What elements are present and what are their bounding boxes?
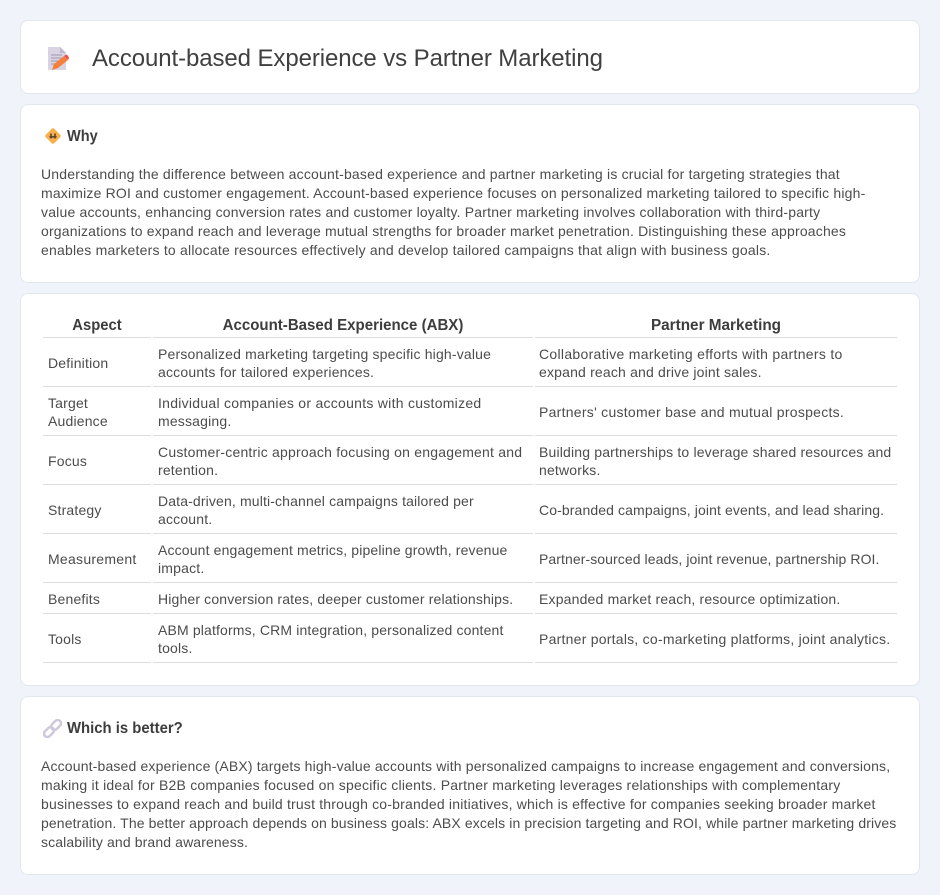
row: target audience: Target	[48, 395, 88, 411]
row: tools: ABM platforms, CRM integration, personalized content	[158, 622, 504, 638]
text block: why body: enables marketers to allocate resources effectively and develop tailored campaigns that align with business goals.	[41, 242, 771, 258]
icon: link	[43, 719, 62, 738]
title: Account-based Experience vs Partner Marketing	[92, 45, 603, 72]
row: target audience	[48, 395, 844, 429]
text block: why body: maximize ROI and customer engagement. Account-based experience focuses on personalized marketing tailored to specific high-	[41, 185, 865, 201]
row: measurement: Account engagement metrics, pipeline growth, revenue	[158, 542, 507, 558]
icon: diamond sign	[45, 128, 61, 144]
panel: title header	[20, 20, 920, 94]
row: benefits	[48, 591, 840, 607]
row: target audience: Audience	[48, 413, 108, 429]
row: measurement	[48, 542, 880, 576]
icon: document with pencil	[48, 47, 69, 70]
row: definition: Collaborative marketing efforts with partners to	[539, 346, 843, 362]
table header	[72, 317, 781, 334]
text block: which is better body: penetration. The better approach depends on business goals: ABX excels in precision targeting and ROI, while partner marketing drives	[41, 815, 896, 831]
row: definition	[48, 346, 843, 380]
text block: which is better body: scalability and brand awareness.	[41, 834, 248, 850]
text block: which is better body: making it ideal for B2B companies focused on specific clients. Partner marketing leverages relationships with complementary	[41, 777, 841, 793]
row: target audience: messaging.	[158, 413, 231, 429]
heading: which is better: Which is better?	[67, 720, 183, 737]
table header: Aspect	[72, 317, 122, 334]
panel: comparison table	[20, 293, 920, 686]
row: definition: Personalized marketing targeting specific high-value	[158, 346, 491, 362]
row: benefits: Benefits	[48, 591, 100, 607]
row: focus: retention.	[158, 462, 218, 478]
text block: which is better body: Account-based experience (ABX) targets high-value accounts with personalized campaigns to increase engagement and conversions,	[41, 758, 890, 774]
row: benefits: Expanded market reach, resource optimization.	[539, 591, 840, 607]
row: focus: networks.	[539, 462, 601, 478]
row: target audience: Individual companies or accounts with customized	[158, 395, 481, 411]
row: focus: Focus	[48, 453, 87, 469]
table header: Account-Based Experience (ABX)	[223, 317, 463, 334]
row: benefits: Higher conversion rates, deeper customer relationships.	[158, 591, 513, 607]
heading: why: Why	[67, 128, 98, 145]
row: measurement: impact.	[158, 560, 204, 576]
row: definition: expand reach and drive joint sales.	[539, 364, 762, 380]
row: tools: tools.	[158, 640, 193, 656]
row: strategy: Strategy	[48, 502, 102, 518]
text block: why body: organizations to expand reach and leverage mutual strengths for broader market penetration. Distinguishing these approaches	[41, 223, 846, 239]
row: focus	[48, 444, 891, 478]
panel: why	[20, 104, 920, 283]
row: focus: Building partnerships to leverage shared resources and	[539, 444, 891, 460]
row: tools	[48, 622, 890, 656]
row: strategy: account.	[158, 511, 212, 527]
row: tools: Partner portals, co-marketing platforms, joint analytics.	[539, 631, 890, 647]
row: measurement: Measurement	[48, 551, 137, 567]
row: focus: Customer-centric approach focusing on engagement and	[158, 444, 522, 460]
text block: which is better body	[41, 758, 896, 850]
row: strategy: Co-branded campaigns, joint events, and lead sharing.	[539, 502, 884, 518]
row: strategy: Data-driven, multi-channel campaigns tailored per	[158, 493, 474, 509]
text block: why body: value accounts, enhancing conversion rates and customer loyalty. Partner marketing involves collaboration with third-party	[41, 204, 820, 220]
text block: why body	[41, 166, 865, 258]
table header: Partner Marketing	[651, 317, 781, 334]
row: measurement: Partner-sourced leads, joint revenue, partnership ROI.	[539, 551, 880, 567]
panel: which is better	[20, 696, 920, 875]
row: target audience: Partners' customer base and mutual prospects.	[539, 404, 844, 420]
row: strategy	[48, 493, 884, 527]
row: tools: Tools	[48, 631, 82, 647]
text block: why body: Understanding the difference between account-based experience and partner marketing is crucial for targeting strategies that	[41, 166, 840, 182]
row: definition: Definition	[48, 355, 108, 371]
row: definition: accounts for tailored experiences.	[158, 364, 374, 380]
text block: which is better body: businesses to expand reach and build trust through co-branded initiatives, which is effective for companies seeking broader market	[41, 796, 876, 812]
